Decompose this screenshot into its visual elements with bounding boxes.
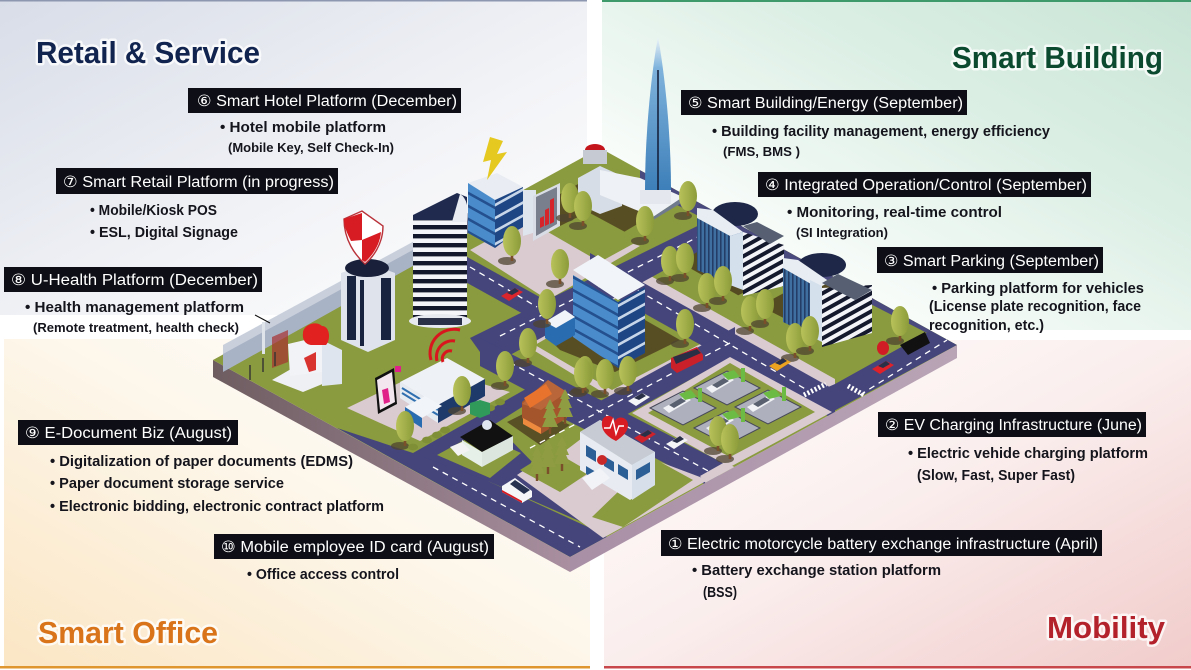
- callout: Smart Parking: ③ Smart Parking (September): [884, 253, 1099, 270]
- icon: H building rear: [697, 202, 784, 296]
- icon: brown corner store: [522, 380, 567, 434]
- trees and shrubs: [391, 328, 592, 450]
- platform sides: [213, 345, 957, 572]
- trees: [533, 289, 694, 398]
- callout: U-Health Platform: [4, 267, 262, 335]
- callout: EV Charging Infrastructure: ② EV Charging Infrastructure (June): [885, 417, 1142, 434]
- callout: U-Health Platform: ⑧ U-Health Platform (December): [11, 272, 258, 289]
- callout: Smart Retail Platform: • Mobile/Kiosk POS: [90, 203, 217, 219]
- callout: Smart Hotel Platform: ⑥ Smart Hotel Platform (December): [197, 93, 457, 110]
- callout: EV Charging Infrastructure: [878, 412, 1148, 484]
- trees: [736, 289, 909, 362]
- callout: Smart Building/Energy: (FMS, BMS ): [723, 145, 800, 159]
- callout: Mobile employee ID card: • Office access control: [247, 567, 399, 583]
- heading: Smart Office: Smart Office: [38, 615, 218, 650]
- callout: Smart Building/Energy: ⑤ Smart Building/Energy (September): [688, 95, 963, 112]
- callout: U-Health Platform: • Health management platform: [25, 300, 244, 316]
- icon: H building front: [783, 253, 872, 347]
- callout: Electric motorcycle battery exchange: [661, 530, 1102, 601]
- icon: skyscraper with podium: [578, 37, 683, 220]
- callout: Smart Parking: [877, 247, 1144, 334]
- icon: security gate and laptop: [250, 315, 342, 392]
- callout: Electric motorcycle battery exchange: (BSS): [703, 585, 737, 601]
- callout: Smart Hotel Platform: (Mobile Key, Self Check-In): [228, 141, 394, 155]
- callout: Smart Hotel Platform: [188, 88, 461, 155]
- panel: Smart Office background: [0, 339, 590, 668]
- back wall: [223, 212, 470, 372]
- heading: Smart Building: Smart Building: [952, 40, 1163, 75]
- panel: Retail & Service background: [0, 0, 587, 315]
- icon: hospital: [580, 416, 655, 500]
- charging stations: [663, 368, 786, 433]
- callout: E-Document Biz: ⑨ E-Document Biz (August): [25, 425, 232, 442]
- icon: tablet with bar chart: [533, 183, 560, 241]
- callout: EV Charging Infrastructure: • Electric vehide charging platform: [908, 446, 1148, 462]
- icon: convenience store: [450, 400, 513, 467]
- callout: Smart Retail Platform: [56, 168, 338, 241]
- heading: Mobility: Mobility: [1047, 610, 1166, 645]
- callout: Smart Building/Energy: [681, 90, 1050, 159]
- panel: Mobility background: [604, 340, 1191, 668]
- callout: E-Document Biz: • Digitalization of paper documents (EDMS): [50, 454, 353, 470]
- callout: EV Charging Infrastructure: (Slow, Fast, Super Fast): [917, 468, 1075, 484]
- icon: lightning building: [468, 137, 536, 248]
- callout: Smart Retail Platform: ⑦ Smart Retail Platform (in progress): [63, 174, 334, 191]
- callout: Smart Parking: • Parking platform for vehicles: [932, 281, 1144, 297]
- callout: Mobile employee ID card: [214, 534, 494, 583]
- trees: [498, 181, 697, 288]
- callout: Electric motorcycle battery exchange: • Battery exchange station platform: [692, 563, 941, 579]
- callout: E-Document Biz: • Paper document storage service: [50, 476, 284, 492]
- trees: [656, 243, 732, 312]
- callout: Integrated Operation/Control: (SI Integration): [796, 226, 888, 240]
- conifers: [529, 389, 573, 481]
- callout: Smart Parking: recognition, etc.): [929, 318, 1044, 334]
- icon: phone with fashion display: [375, 366, 401, 414]
- callout: Integrated Operation/Control: [758, 172, 1091, 240]
- icon: ambulance: [502, 478, 532, 503]
- callout: E-Document Biz: • Electronic bidding, electronic contract platform: [50, 499, 384, 515]
- trees near charging lot: [704, 416, 739, 463]
- panel: Smart Building background: [602, 0, 1191, 330]
- callout: Electric motorcycle battery exchange: ① Electric motorcycle battery exchange infrastructure (April): [668, 536, 1098, 553]
- icon: central blue building: [545, 255, 645, 368]
- callout: Mobile employee ID card: ⑩ Mobile employee ID card (August): [221, 539, 489, 556]
- callout: Smart Hotel Platform: • Hotel mobile platform: [220, 120, 386, 136]
- callout: Smart Parking: (License plate recognition, face: [929, 299, 1141, 315]
- isometric city map: [213, 37, 957, 572]
- callout: E-Document Biz: [18, 420, 384, 515]
- platform ground layout: [213, 148, 957, 557]
- icon: shield tower: [341, 211, 395, 352]
- callout: Integrated Operation/Control: • Monitoring, real-time control: [787, 205, 1002, 221]
- callout: U-Health Platform: (Remote treatment, health check): [33, 321, 239, 335]
- heading: Retail & Service: Retail & Service: [36, 35, 260, 70]
- callout: Smart Building/Energy: • Building facility management, energy efficiency: [712, 124, 1050, 140]
- icon: wifi building: [400, 329, 485, 428]
- vehicles: [501, 288, 930, 449]
- callout: Smart Retail Platform: • ESL, Digital Signage: [90, 225, 238, 241]
- icon: striped round tower: [409, 193, 471, 328]
- callout: Integrated Operation/Control: ④ Integrated Operation/Control (September): [765, 177, 1087, 194]
